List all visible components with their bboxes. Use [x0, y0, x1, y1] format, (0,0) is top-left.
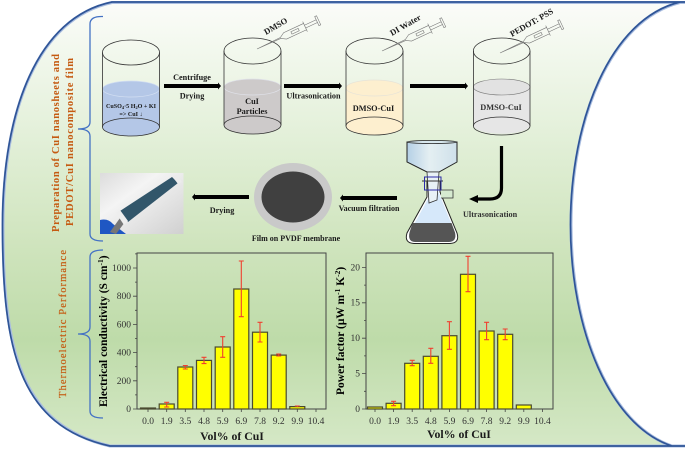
- arrow: drying: Drying: [210, 206, 235, 215]
- x axis labels: 0.0: [142, 417, 154, 427]
- y axis labels: 800: [117, 292, 131, 302]
- y axis labels: 200: [117, 377, 131, 387]
- y axis labels: 0: [355, 405, 360, 415]
- x axis labels: 4.8: [198, 417, 210, 427]
- arrow: vacuum filtration: [339, 194, 400, 213]
- x axis labels: 0.0: [369, 417, 381, 427]
- beaker 3: DMSO-CuI: [346, 38, 403, 135]
- x axis labels: 1.9: [388, 417, 400, 427]
- y axis labels: [112, 264, 131, 415]
- heading: preparation: [51, 54, 76, 232]
- x axis labels: 9.9: [291, 417, 303, 427]
- error bars: [391, 256, 508, 406]
- beaker 1: 2: [135, 105, 138, 110]
- axis ticks: [362, 267, 542, 412]
- y axis labels: 20: [350, 263, 360, 273]
- x axis labels: 4.8: [425, 417, 437, 427]
- y axis labels: [350, 263, 360, 415]
- x axis title: Vol% of CuI: [427, 427, 491, 441]
- y axis labels: 0: [126, 405, 131, 415]
- syringe: DI water: [380, 12, 446, 56]
- arrow: ultrasonication: [284, 82, 342, 100]
- film on PVDF membrane: Film on PVDF membrane: [252, 234, 341, 243]
- syringe: PEDOT:PSS: [498, 6, 564, 58]
- beaker 1: 4: [122, 105, 125, 110]
- beaker 1: [102, 40, 160, 136]
- y axis title: -1: [96, 259, 105, 266]
- arrow: curved to flask: [469, 146, 502, 203]
- bracket: preparation: [78, 16, 103, 241]
- x axis labels: 9.2: [499, 417, 511, 427]
- bars: [140, 289, 305, 409]
- x axis labels: 10.4: [534, 417, 551, 427]
- beaker 2: CuI particles: [224, 38, 281, 134]
- y axis labels: 15: [350, 299, 360, 309]
- y axis labels: 600: [117, 320, 131, 330]
- x axis labels: 5.9: [217, 417, 229, 427]
- arrow: vacuum filtration: Vacuum filtration: [339, 204, 400, 213]
- y axis title: ): [335, 267, 347, 271]
- plot frame: [137, 253, 326, 409]
- x axis labels: 1.9: [161, 417, 173, 427]
- heading: preparation: PEDOT/CuI nanocomposite film: [65, 58, 76, 226]
- y axis title: -1: [333, 288, 342, 295]
- x axis labels: 7.8: [254, 417, 266, 427]
- bar chart: electrical conductivity: [96, 253, 326, 443]
- x axis labels: 6.9: [235, 417, 247, 427]
- beaker 1: ·5 H: [124, 104, 136, 110]
- y axis title: Electrical conductivity (S cm: [98, 266, 110, 407]
- y axis title: Power factor (μW m: [335, 295, 347, 395]
- y axis title: K: [335, 277, 347, 289]
- syringe: DMSO: DMSO: [262, 15, 289, 37]
- beaker 1: CuSO: [106, 104, 122, 110]
- x axis labels: [369, 417, 551, 427]
- beaker 2: CuI particles: Particles: [237, 107, 268, 116]
- arrow: to PEDOT:PSS beaker: [410, 82, 468, 90]
- film on PVDF membrane: [252, 163, 341, 243]
- syringe: PEDOT:PSS: PEDOT: PSS: [508, 6, 555, 39]
- y axis labels: 5: [355, 370, 360, 380]
- syringe: DI water: DI Water: [388, 12, 423, 38]
- arrow: centrifuge and drying: Centrifuge: [173, 73, 211, 82]
- x axis title: Vol% of CuI: [200, 429, 264, 443]
- arrow: ultrasonication: Ultrasonication: [286, 92, 341, 100]
- y axis title: ): [98, 255, 110, 259]
- bar chart: power factor: [333, 253, 553, 441]
- error bars: [164, 261, 300, 407]
- beaker 4: DMSO-CuI with PEDOT:PSS: [473, 38, 530, 135]
- bracket: thermoelectric: [78, 250, 103, 418]
- y axis labels: 400: [117, 348, 131, 358]
- arrow: centrifuge and drying: Drying: [180, 92, 205, 100]
- y axis labels: 10: [350, 334, 360, 344]
- vacuum filtration flask: [406, 140, 458, 244]
- beaker 3: DMSO-CuI: DMSO-CuI: [353, 104, 394, 113]
- plot frame: [366, 253, 553, 409]
- heading: thermoelectric performance: Thermoelectric Performance: [58, 250, 69, 398]
- y axis labels: 1000: [112, 264, 131, 274]
- beaker 1: O + KI: [138, 104, 157, 110]
- bars: [368, 274, 531, 409]
- axis ticks: [133, 254, 316, 412]
- photo: coated rod: [100, 173, 184, 234]
- label: ultrasonication: Ultrasonication: [463, 210, 518, 219]
- arrow: centrifuge and drying: [164, 73, 221, 100]
- beaker 2: CuI particles: CuI: [245, 97, 259, 106]
- x axis labels: 3.5: [179, 417, 191, 427]
- x axis labels: 5.9: [443, 417, 456, 427]
- beaker 1: => CuI ↓: [119, 112, 143, 118]
- x axis labels: [142, 417, 325, 427]
- x axis labels: 7.8: [481, 417, 493, 427]
- x axis labels: 3.5: [406, 417, 418, 427]
- arrow: drying: [192, 194, 249, 215]
- syringe: DMSO: [255, 15, 321, 54]
- x axis labels: 6.9: [462, 417, 474, 427]
- x axis labels: 9.9: [518, 417, 530, 427]
- y axis title: -2: [333, 270, 342, 277]
- x axis labels: 9.2: [273, 417, 285, 427]
- x axis labels: 10.4: [308, 417, 325, 427]
- heading: preparation: Preparation of CuI nanosheets and: [51, 54, 62, 232]
- beaker 4: DMSO-CuI with PEDOT:PSS: DMSO-CuI: [480, 103, 522, 112]
